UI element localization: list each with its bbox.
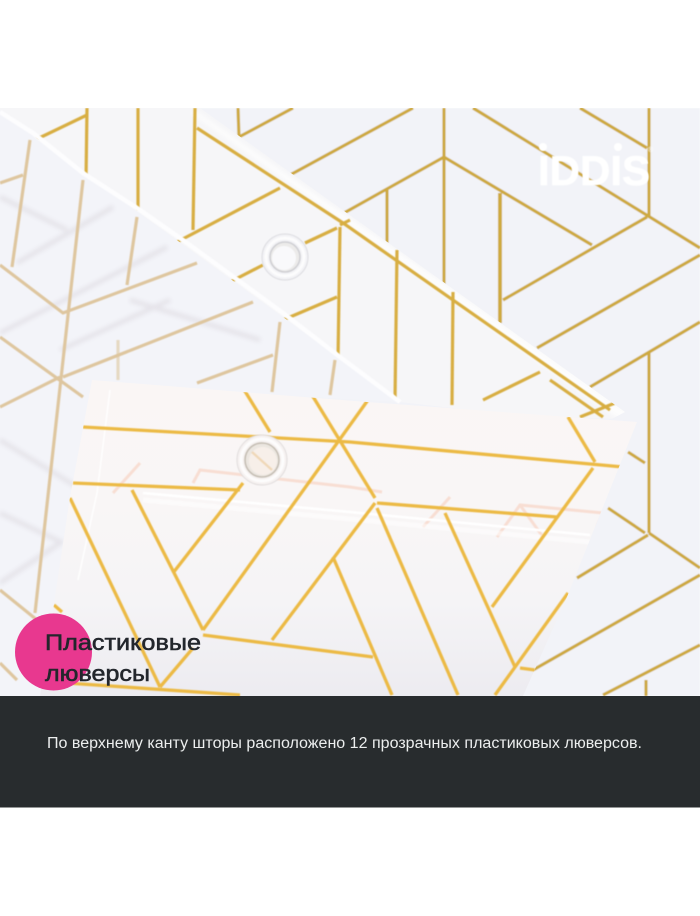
lower left see-through layer (0, 138, 337, 682)
heading: Пластиковые (45, 630, 201, 655)
folded top hem layer (0, 108, 640, 420)
heading: люверсы (45, 661, 150, 686)
ghost print lines (113, 463, 603, 537)
gold print lines (54, 388, 623, 695)
pink circle (15, 614, 92, 690)
photo: curtain fabric (0, 108, 700, 700)
back fabric layer (200, 108, 700, 696)
logo: IDDIS: ® (648, 146, 654, 154)
hem stitching (79, 493, 590, 574)
icon: lower grommet (237, 435, 287, 485)
front hem panel (40, 390, 620, 696)
fold edge (0, 112, 400, 402)
dark caption band (0, 696, 700, 808)
icon: upper grommet (262, 234, 308, 280)
badge: pink circle with heading (15, 614, 201, 690)
caption text: По верхнему канту шторы расположено 12 прозрачных пластиковых люверсов. (47, 735, 642, 752)
logo: IDDIS: IDDIS (538, 147, 650, 194)
infographic canvas (0, 108, 700, 808)
